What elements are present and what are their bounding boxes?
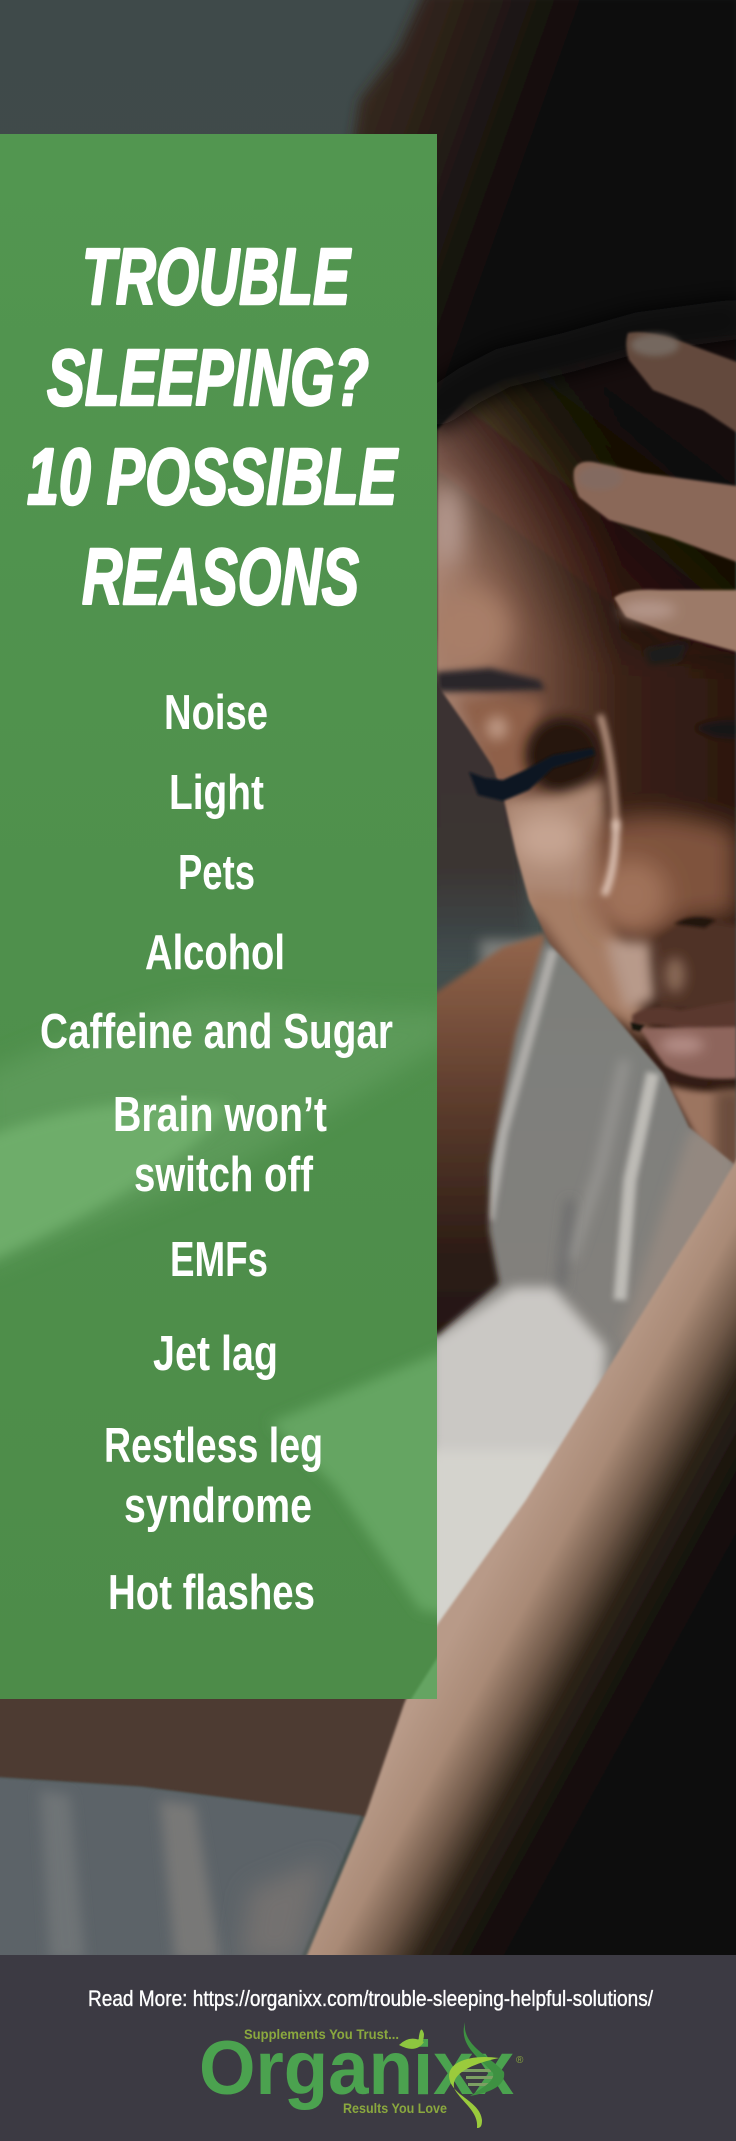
- reason: caffeine and sugar: Caffeine and Sugar: [40, 1005, 393, 1059]
- jaw: [520, 890, 650, 1040]
- eyelashes: [469, 748, 595, 801]
- tagline bottom: Results You Love: [343, 2100, 447, 2116]
- reason: hot flashes: Hot flashes: [108, 1566, 315, 1620]
- fingers: [574, 332, 736, 654]
- lips: [632, 1000, 736, 1030]
- Organixx logo: [199, 2022, 524, 2128]
- read more link: Read More: https://organixx.com/trouble-sleeping-helpful-solutions/: [88, 1986, 654, 2011]
- reason: restless leg syndrome: Restless leg: [104, 1419, 323, 1473]
- reason: jet lag: Jet lag: [153, 1327, 278, 1381]
- upper lip highlights: [605, 940, 655, 1010]
- nose: [596, 815, 736, 938]
- finger three: [614, 590, 736, 654]
- reason: pets: Pets: [178, 846, 255, 900]
- panel light swooshes: [0, 1000, 450, 1704]
- DNA helix icon: [449, 2022, 504, 2128]
- eyebrow: [436, 668, 545, 692]
- list of ten reasons: [40, 686, 393, 1620]
- eye lid: [460, 700, 540, 780]
- eye socket shadow: [525, 717, 601, 793]
- forehead shading: [437, 336, 736, 682]
- reason: brain won't switch off: Brain won’t: [113, 1088, 327, 1142]
- finger one: [626, 332, 736, 438]
- under nose: [655, 920, 736, 1010]
- reason: restless leg syndrome: [104, 1419, 323, 1533]
- reason: noise: Noise: [164, 686, 268, 740]
- reason: light: Light: [169, 766, 264, 820]
- hair: [348, 0, 736, 643]
- title: 10 POSSIBLE: [27, 432, 399, 521]
- title: REASONS: [82, 532, 359, 621]
- lower left shirt: [0, 1777, 361, 1960]
- title: TROUBLE: [82, 232, 352, 321]
- reason: restless leg syndrome: syndrome: [124, 1479, 312, 1533]
- tagline top: Supplements You Trust...: [244, 2026, 399, 2042]
- dark hair beneath the eye and slate background: [437, 639, 528, 935]
- reason: EMFs: EMFs: [170, 1233, 268, 1287]
- reason: brain won't switch off: switch off: [134, 1148, 314, 1202]
- reason: brain won't switch off: [113, 1088, 327, 1202]
- chin: [668, 1082, 736, 1154]
- finger two: [574, 462, 736, 565]
- logo wordmark: Organixx: [199, 2026, 514, 2111]
- reason: alcohol: Alcohol: [145, 926, 285, 980]
- face: [437, 372, 736, 1164]
- shoulder: [425, 933, 546, 1335]
- blurred arm behind panel, lower left: [0, 1699, 407, 1817]
- footer bar: [0, 1955, 736, 2141]
- foreground arm: [305, 1145, 736, 1960]
- hairline shadow over the forehead: [425, 318, 736, 415]
- shirt: [430, 940, 736, 1640]
- green text panel: [0, 134, 450, 1704]
- registered mark: ®: [516, 2055, 524, 2066]
- leaf icon: [399, 2029, 424, 2049]
- other eye: [696, 722, 736, 738]
- cheek highlight: [500, 780, 608, 910]
- title: SLEEPING?: [47, 333, 369, 422]
- title: [27, 232, 399, 621]
